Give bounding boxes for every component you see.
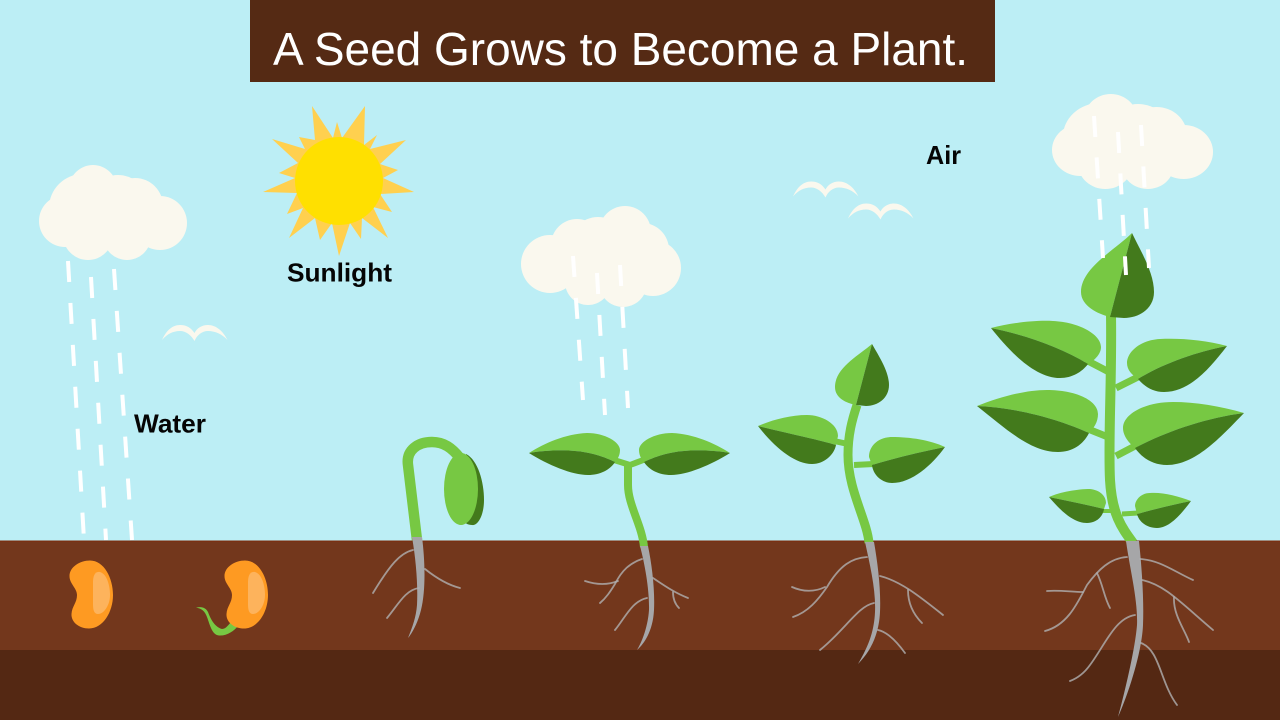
upper left leaf (991, 321, 1101, 378)
rain right (1094, 116, 1149, 275)
sprout (196, 607, 238, 636)
left leaf (758, 415, 838, 464)
roots (1045, 541, 1213, 717)
seed 1 (70, 560, 113, 628)
seed 2 with sprout (196, 560, 268, 636)
icon: bird upper right (793, 182, 858, 198)
upper right leaf (1127, 339, 1227, 392)
label: water: Water (134, 408, 206, 438)
lower left leaf (1049, 489, 1106, 523)
icon: bird left (162, 325, 228, 341)
soil deep layer (0, 650, 1280, 720)
title text: A Seed Grows to Become a Plant. (273, 23, 968, 75)
icon: cloud right (1052, 94, 1213, 189)
middle right leaf (1123, 402, 1244, 465)
middle left leaf (977, 390, 1098, 452)
icon: sun (263, 106, 414, 256)
icon: bird lower right (848, 204, 914, 220)
right leaf (869, 437, 945, 483)
icon: cloud middle (521, 206, 681, 307)
roots (373, 537, 460, 638)
plant stage 3: three leaves (758, 344, 945, 664)
plant stage 1: bent sprout (373, 442, 484, 638)
top leaf (1081, 233, 1154, 318)
lower right leaf (1135, 493, 1191, 528)
rain left (68, 261, 132, 540)
soil upper layer (0, 541, 1280, 651)
roots (792, 542, 943, 664)
icon: cloud left (39, 165, 187, 260)
plant stage 4: full plant (977, 233, 1244, 717)
label: air: Air (926, 140, 961, 170)
left leaf (529, 433, 620, 475)
plant stage 2: two leaves (529, 433, 730, 650)
label: sunlight: Sunlight (287, 258, 392, 288)
right leaf (639, 433, 730, 475)
sky background (0, 0, 1280, 541)
rain middle (573, 256, 628, 415)
roots (585, 546, 688, 650)
title banner (250, 0, 995, 82)
seed leaves (444, 453, 484, 525)
top leaf (835, 344, 889, 406)
